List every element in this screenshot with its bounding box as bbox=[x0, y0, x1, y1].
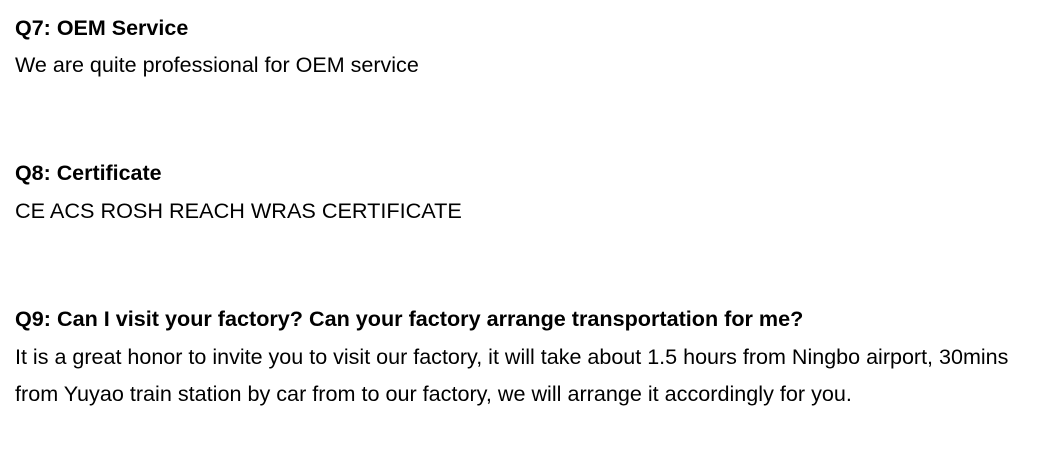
heading: Q8: Q8: Certificate bbox=[15, 161, 162, 185]
heading: Q7: Q7: OEM Service bbox=[15, 16, 188, 40]
text: Q7 answer: We are quite professional for OEM service bbox=[15, 53, 419, 77]
text: Q9 answer line 1: It is a great honor to invite you to visit our factory, it will take about 1.5 hours from Ningbo airport, 30mins bbox=[15, 345, 1008, 369]
text: Q9 answer line 2: from Yuyao train station by car from to our factory, we will arrange it accordingly for you. bbox=[15, 381, 852, 406]
heading: Q9: Q9: Can I visit your factory? Can your factory arrange transportation for me? bbox=[15, 306, 803, 331]
text: Q8 answer: CE ACS ROSH REACH WRAS CERTIFICATE bbox=[15, 198, 462, 223]
